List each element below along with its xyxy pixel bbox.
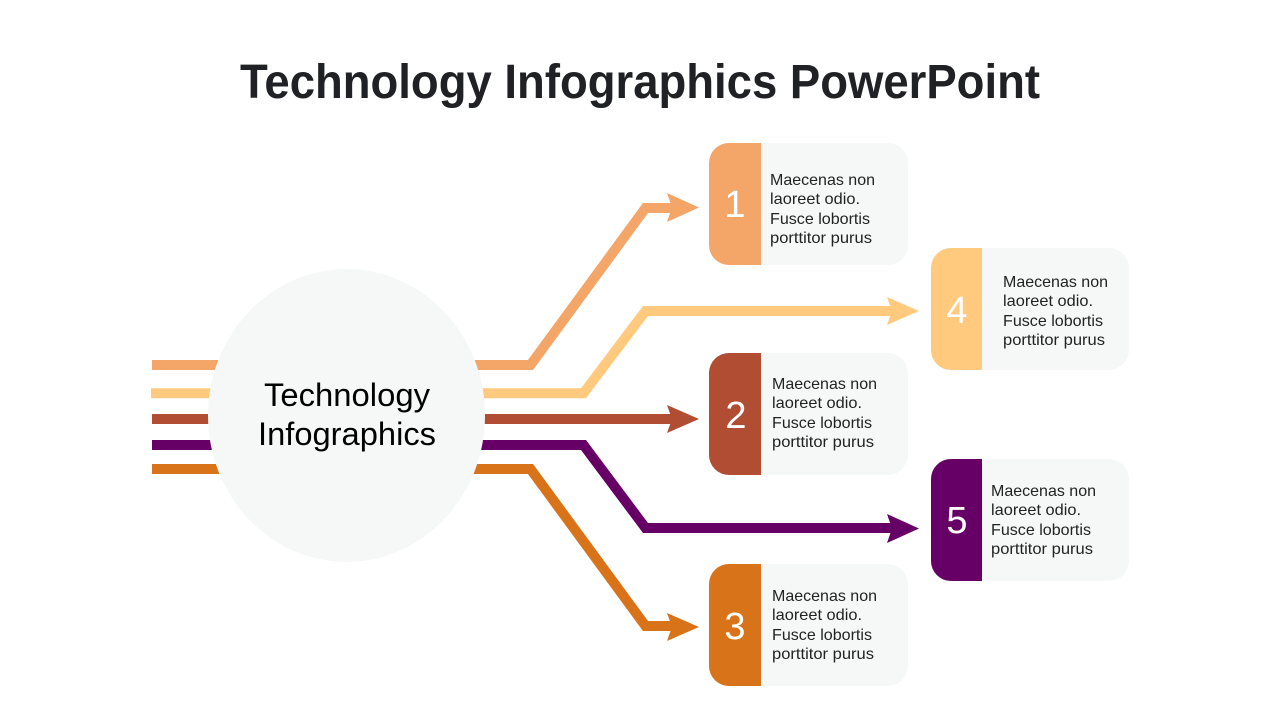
card 4 (931, 248, 1129, 370)
arrow 3: dark orange (152, 469, 699, 641)
card 1: porttitor purus (770, 230, 872, 247)
card 2: laoreet odio. (772, 395, 862, 412)
card 5 (931, 459, 1129, 581)
card 5: 5 (946, 500, 968, 542)
card 2: Fusce lobortis (772, 415, 872, 432)
card 2: porttitor purus (772, 434, 874, 451)
central circle (208, 269, 485, 562)
card 1 (709, 143, 908, 265)
card 3: Maecenas non (772, 588, 877, 605)
card 5: Fusce lobortis (991, 522, 1091, 539)
arrow 2: brown (152, 405, 699, 433)
card 1: 1 (724, 184, 746, 226)
card 4: laoreet odio. (1003, 293, 1093, 310)
card 4: Maecenas non (1003, 274, 1108, 291)
card 2: Maecenas non (772, 376, 877, 393)
central circle: Infographics (258, 416, 436, 452)
card 1: laoreet odio. (770, 191, 860, 208)
card 1: Fusce lobortis (770, 211, 870, 228)
card 5: Maecenas non (991, 483, 1096, 500)
card 2: 2 (725, 395, 747, 437)
card 4: 4 (946, 290, 968, 332)
arrow 1: light orange (152, 193, 699, 365)
title: Technology Infographics PowerPoint (240, 56, 1040, 109)
central circle: Technology (264, 377, 430, 413)
card 3: 3 (724, 606, 746, 648)
card 3: Fusce lobortis (772, 627, 872, 644)
card 5: porttitor purus (991, 541, 1093, 558)
card 3: porttitor purus (772, 646, 874, 663)
arrow 4: yellow (151, 297, 919, 393)
card 4: porttitor purus (1003, 332, 1105, 349)
card 3: laoreet odio. (772, 607, 862, 624)
card 1: Maecenas non (770, 172, 875, 189)
card 2 (709, 353, 908, 475)
card 4: Fusce lobortis (1003, 313, 1103, 330)
arrow 5: purple (152, 445, 919, 543)
card 5: laoreet odio. (991, 502, 1081, 519)
card 3 (709, 564, 908, 686)
